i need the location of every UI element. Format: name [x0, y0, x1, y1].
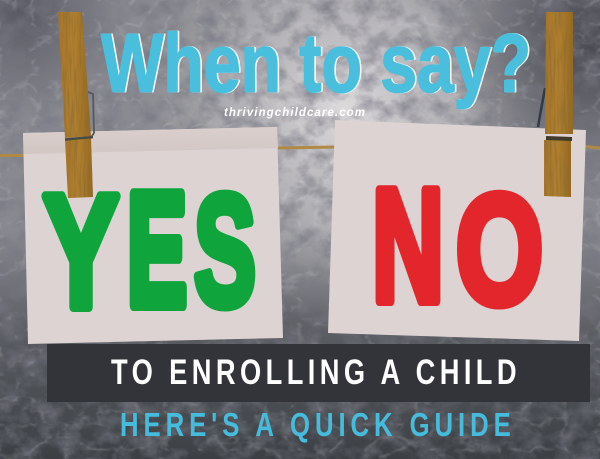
- word: NO: O: [456, 163, 543, 336]
- word: YES: Y: [43, 162, 119, 342]
- website url: thrivingchildcare.com: [224, 107, 365, 119]
- word: NO: N: [372, 156, 444, 336]
- word: YES: E: [127, 160, 187, 340]
- subheading: HERE'S A QUICK GUIDE: [120, 407, 511, 444]
- banner: to enrolling a child: [47, 344, 590, 402]
- panel: no note: [328, 120, 586, 341]
- icon: left clothespin: [58, 12, 94, 198]
- word: YES: S: [194, 163, 256, 339]
- paper fold: yes: [23, 127, 278, 154]
- word: NO: [372, 156, 543, 336]
- rope: [0, 146, 600, 156]
- panel: yes note: [23, 127, 283, 344]
- icon: right clothespin: [538, 12, 573, 197]
- banner: to enrolling a child: TO ENROLLING A CHILD: [111, 353, 517, 392]
- word: YES: [43, 160, 256, 342]
